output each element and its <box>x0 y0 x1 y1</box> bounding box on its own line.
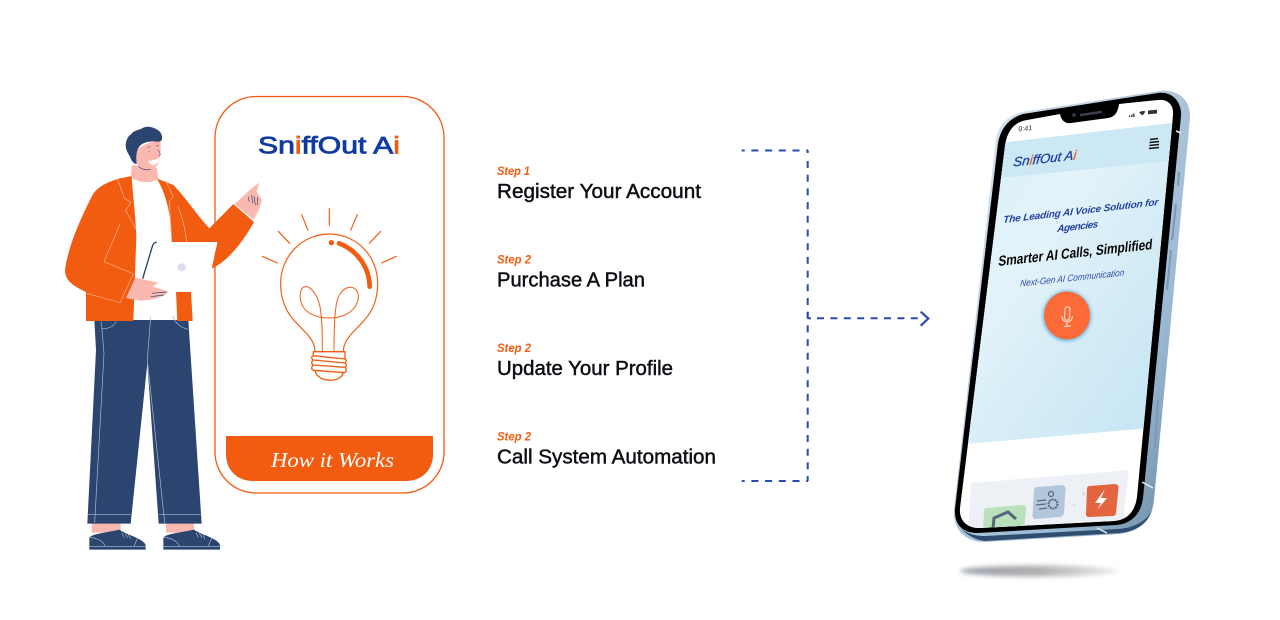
step 4 title: Call System Automation <box>497 446 716 468</box>
icon: light bulb <box>262 209 396 380</box>
arrow line <box>817 317 921 319</box>
bracket corners <box>807 150 809 481</box>
steps list <box>497 166 716 468</box>
menu icon <box>1149 138 1159 148</box>
step 3 title: Update Your Profile <box>497 358 673 380</box>
phone underside <box>956 510 1152 541</box>
arrow stub <box>808 317 811 319</box>
step 2 title: Purchase A Plan <box>497 270 645 292</box>
mic button disc <box>1044 292 1090 340</box>
tablet <box>143 242 217 292</box>
wifi <box>1139 111 1146 116</box>
trousers <box>87 320 202 524</box>
step 2 <box>497 254 645 292</box>
mic button <box>1042 290 1092 342</box>
phone side buttons <box>1155 172 1179 448</box>
step 3 <box>497 343 673 380</box>
infographic canvas <box>65 90 1190 580</box>
finger lines <box>151 195 257 297</box>
phone headline blue: The Leading AI Voice Solution for <box>1003 197 1160 226</box>
icon: robot arm <box>993 512 1016 528</box>
step 2 label: Step 2 <box>497 254 532 266</box>
signal bars <box>1129 114 1134 117</box>
phone headline second line: Agencies <box>1056 219 1099 235</box>
icon: gears <box>1036 492 1058 509</box>
bulb dot <box>329 240 334 245</box>
shirt <box>131 176 177 315</box>
trouser seams <box>87 316 202 523</box>
step 1 <box>497 166 701 203</box>
jacket left <box>65 176 136 321</box>
card: how it works <box>215 96 444 493</box>
step 1 title: Register Your Account <box>497 181 701 203</box>
face <box>135 141 161 170</box>
phone bezel <box>955 93 1181 533</box>
banner label: How it Works <box>270 448 394 472</box>
camera dot <box>1072 113 1076 117</box>
arrow head <box>921 312 928 326</box>
banner: how it works <box>226 436 433 481</box>
step 4 <box>497 432 716 468</box>
eyes and nose <box>147 145 160 156</box>
icon: microphone <box>1062 307 1072 326</box>
bulb glass <box>281 234 378 352</box>
phone subheading: Next-Gen AI Communication <box>1020 268 1125 289</box>
shoes <box>89 530 220 550</box>
jacket seams <box>87 179 187 303</box>
neck <box>131 165 158 182</box>
phone logo: SniffOut Ai <box>1013 147 1078 169</box>
status icons <box>1129 110 1157 117</box>
tablet dot <box>177 263 186 271</box>
bulb filament <box>300 287 358 352</box>
phone main heading: Smarter AI Calls, Simplified <box>998 237 1153 270</box>
card outline <box>215 96 444 493</box>
step 3 label: Step 2 <box>497 343 532 355</box>
tablet edge <box>143 242 157 279</box>
phone screen <box>960 100 1174 528</box>
presenter figure <box>65 127 262 550</box>
bracket <box>742 150 808 481</box>
hair <box>126 127 162 164</box>
icon: robot arm tile <box>983 505 1026 530</box>
smile <box>148 157 160 165</box>
pointing hand <box>235 183 262 219</box>
dashed bracket connector <box>742 150 928 481</box>
mic button glow <box>1042 290 1092 342</box>
jaw line <box>138 167 151 170</box>
jacket right and sleeve <box>157 178 254 269</box>
phone metal frame <box>954 91 1190 542</box>
icon: lightning bolt <box>1095 489 1107 510</box>
icon: lightning tile <box>1086 484 1119 517</box>
status time: 9:41 <box>1018 125 1033 133</box>
bulb rays <box>262 209 396 263</box>
phone mockup <box>950 90 1190 576</box>
phone floor shadow <box>960 566 1118 576</box>
jacket hem <box>176 292 193 321</box>
holding hand <box>126 278 168 301</box>
step 1 label: Step 1 <box>497 166 530 178</box>
illustration: presenter and light bulb <box>65 127 396 550</box>
bulb screw base <box>312 352 346 380</box>
ankles <box>92 522 194 533</box>
hero background <box>955 122 1180 445</box>
nav strip <box>1000 122 1180 178</box>
frame highlights <box>1097 131 1181 533</box>
icon: gears tile <box>1032 485 1066 519</box>
step 4 label: Step 2 <box>497 432 532 444</box>
feature panel <box>968 470 1129 528</box>
bulb highlight <box>339 243 370 287</box>
screen background <box>960 100 1174 528</box>
shoe details <box>89 533 220 547</box>
bracket spine <box>807 161 809 478</box>
speaker <box>1081 112 1101 115</box>
battery <box>1148 110 1157 114</box>
small carousel arrows <box>1072 491 1086 507</box>
logo: SniffOut Ai: Sn iffOut A i <box>258 132 400 160</box>
